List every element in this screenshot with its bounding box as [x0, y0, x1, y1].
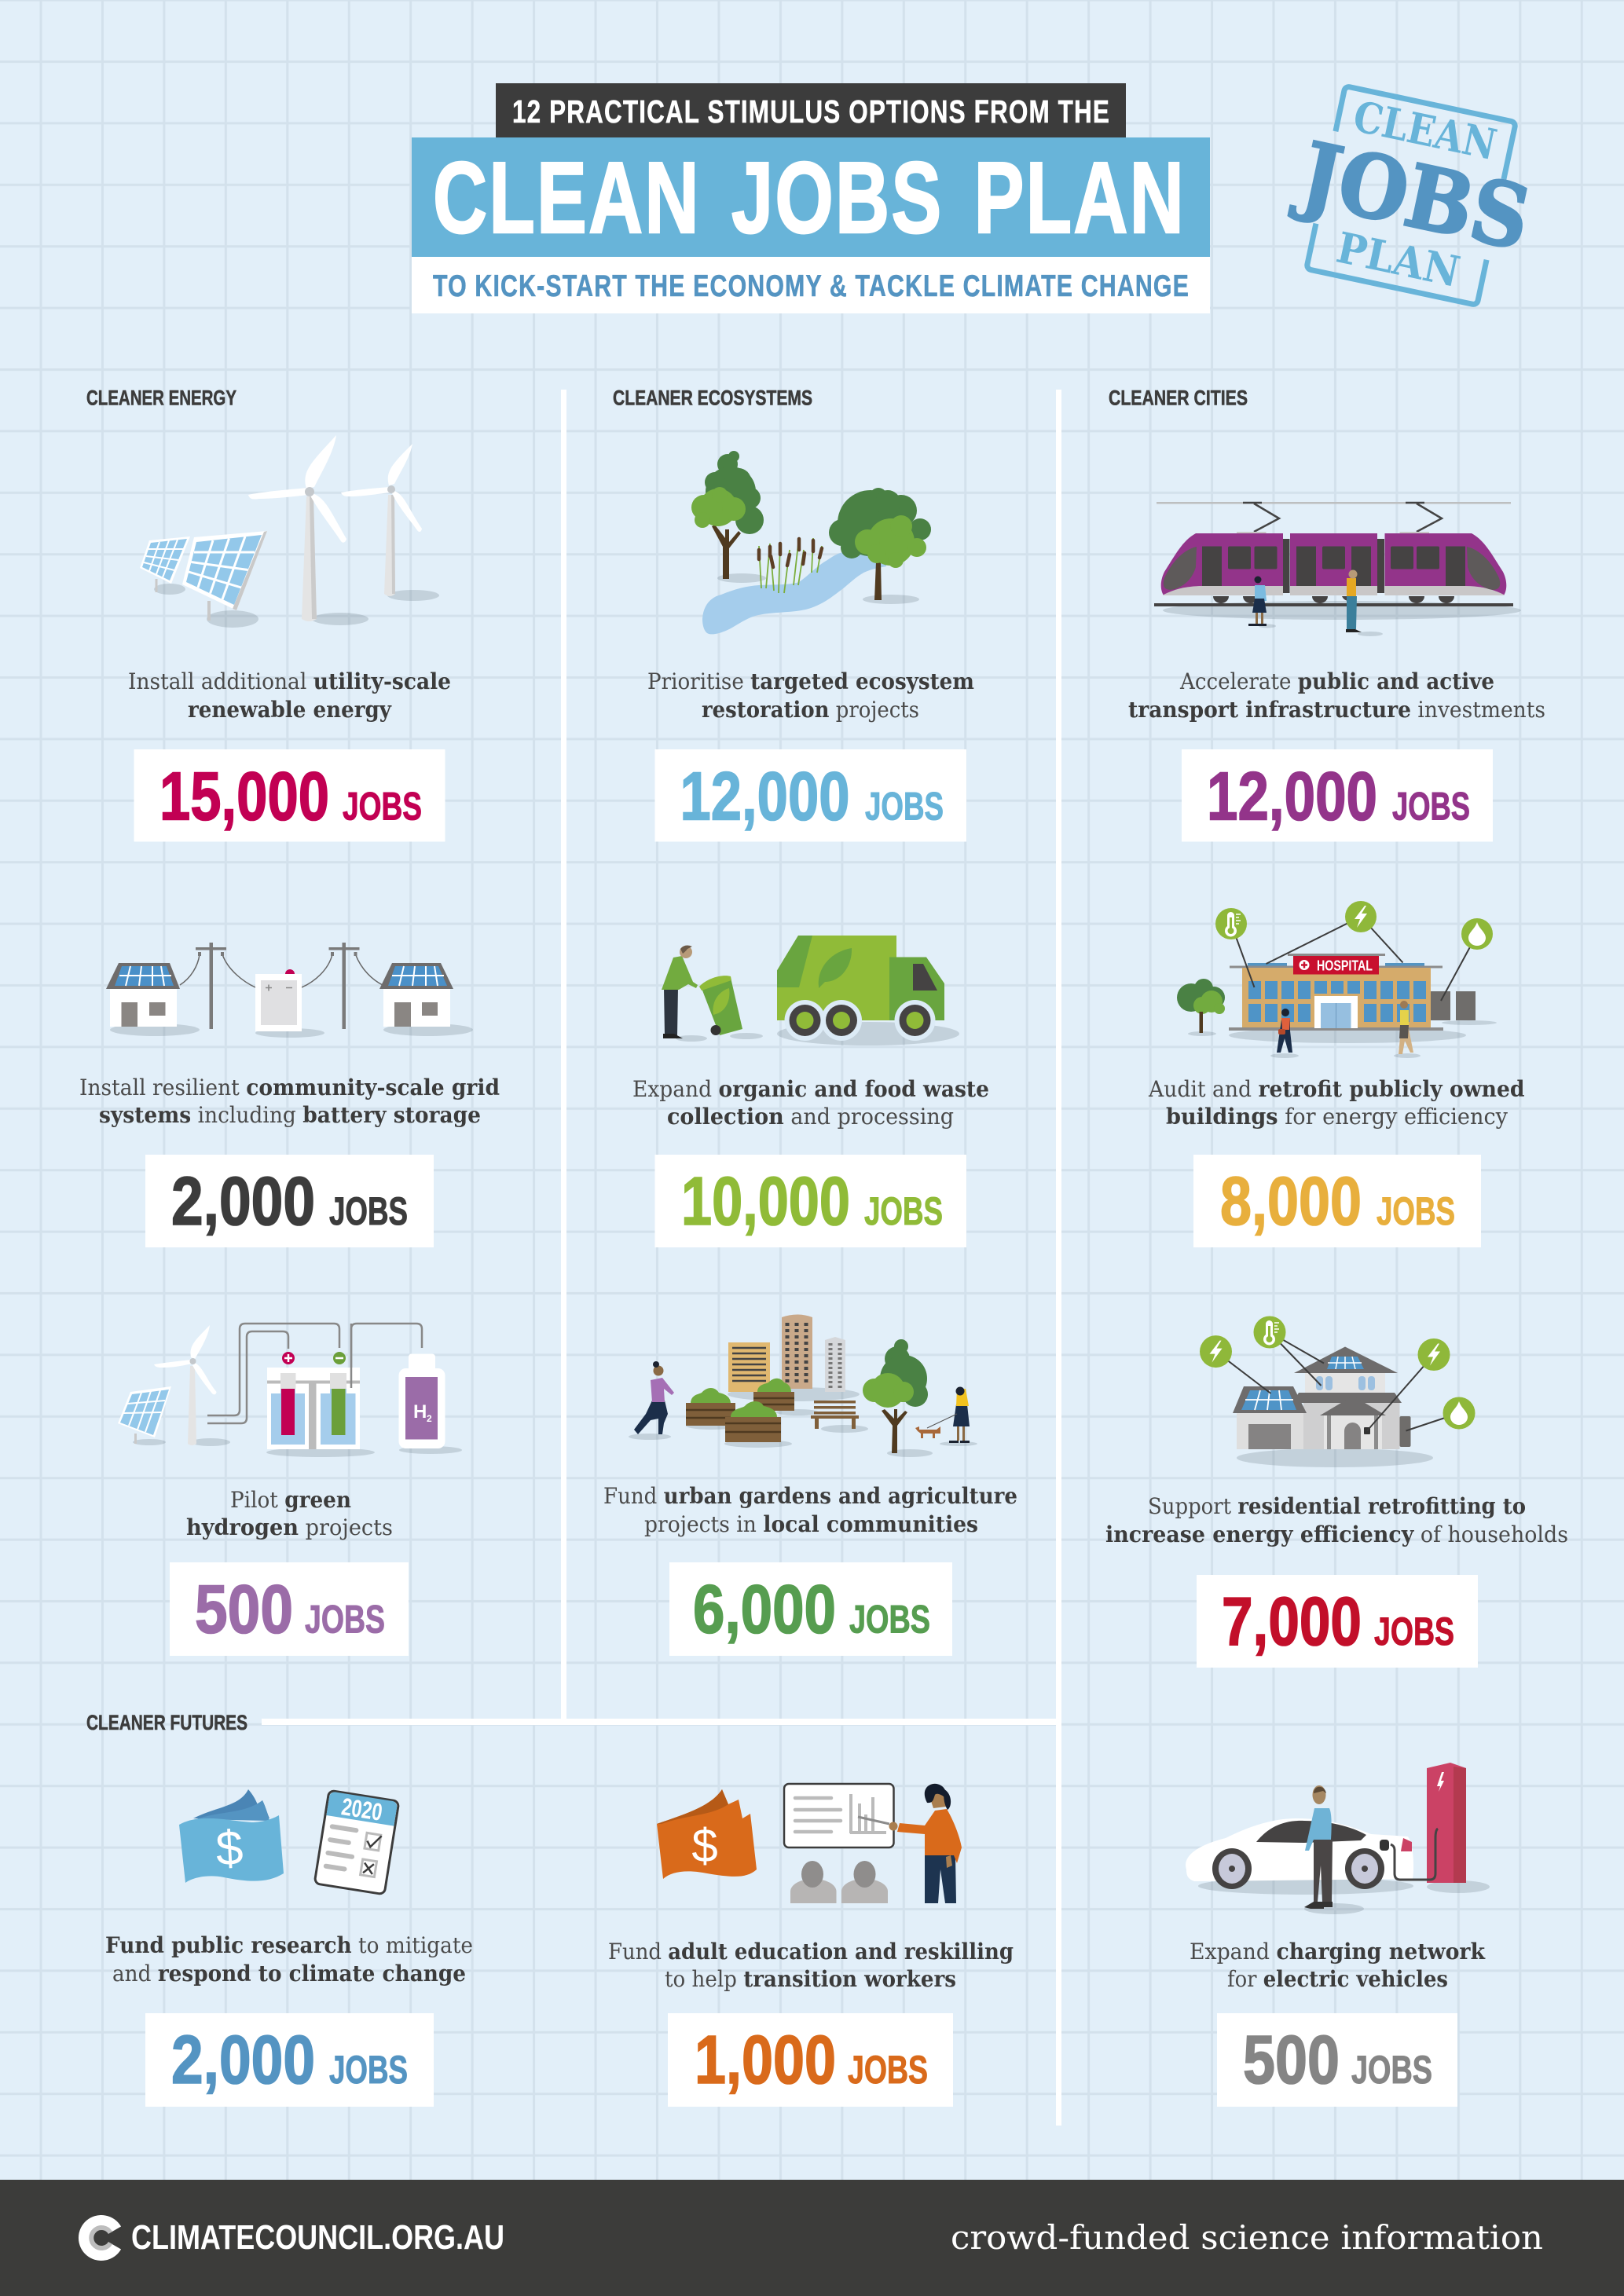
panel: community-scale grid	[79, 943, 500, 1247]
description line 2: projects in local communities	[644, 1511, 978, 1537]
description: Pilot green	[230, 1487, 351, 1513]
jobs badge: 8,000: 8,000	[1220, 1163, 1362, 1240]
icon: wind turbines and solar panels	[140, 435, 439, 628]
description line 2: buildings for energy efficiency	[1166, 1104, 1508, 1130]
description line 2: increase energy efficiency of households	[1105, 1522, 1568, 1547]
logo mark	[84, 2221, 116, 2255]
icon: banknote and presenter with audience	[657, 1784, 962, 1903]
jobs badge: 2,000: 2,000	[171, 1163, 315, 1240]
description: Prioritise targeted ecosystem	[647, 668, 974, 694]
jobs badge: 2,000	[145, 1155, 434, 1247]
stamp logo: clean jobs plan: PLAN	[1333, 222, 1465, 297]
description: Fund public research to mitigate	[105, 1932, 473, 1958]
jobs badge: 1,000	[668, 2013, 953, 2107]
description: Install resilient community-scale grid	[79, 1075, 500, 1100]
stamp logo: clean jobs plan: CLEAN	[1349, 90, 1501, 170]
description: Audit and retrofit publicly owned	[1148, 1076, 1524, 1102]
jobs badge: 6,000	[669, 1562, 952, 1656]
description line 2: restoration projects	[702, 697, 919, 723]
stamp logo: clean jobs plan	[1278, 80, 1547, 312]
icon: city park with gardens and people	[629, 1315, 977, 1457]
panel: retrofit public buildings	[1148, 901, 1524, 1247]
jobs badge: 15,000: 15,000	[159, 759, 329, 834]
jobs badge: 500: JOBS	[305, 1598, 385, 1642]
panel: charging network	[1186, 1763, 1490, 2107]
description: Accelerate public and active	[1179, 668, 1494, 694]
jobs badge: 7,000: 7,000	[1222, 1584, 1362, 1660]
icon: garbage truck and worker with bin	[662, 936, 959, 1045]
kicker bar	[496, 83, 1126, 137]
jobs badge: 12,000	[1182, 749, 1493, 842]
panel: ecosystem restoration	[647, 451, 974, 842]
section heading: cleaner ecosystems: CLEANER ECOSYSTEMS	[613, 386, 812, 410]
icon: house with efficiency markers	[1200, 1316, 1476, 1467]
icon: hospital with efficiency markers: HOSPITAL	[1317, 958, 1373, 974]
description line 2: and respond to climate change	[112, 1961, 466, 1987]
jobs badge: 10,000	[655, 1155, 966, 1247]
panel: public research	[105, 1789, 473, 2107]
section heading: cleaner energy: CLEANER ENERGY	[86, 386, 236, 410]
description line 2: to help transition workers	[665, 1966, 956, 1992]
description: Expand charging network	[1190, 1939, 1486, 1965]
panel: public and active transport	[1128, 502, 1545, 842]
description line 2: for electric vehicles	[1227, 1966, 1448, 1992]
description line 2: renewable energy	[188, 697, 392, 723]
jobs badge: 15,000	[134, 749, 445, 842]
icon: electrolyser, turbine and hydrogen bottle	[118, 1324, 462, 1457]
icon: banknotes and 2020 checklist	[179, 1789, 399, 1895]
panel: green hydrogen	[118, 1324, 462, 1656]
icon: trees, river and reeds	[691, 451, 931, 634]
description: Support residential retrofitting to	[1148, 1493, 1526, 1519]
icon: banknotes and 2020 checklist: 2020	[339, 1792, 384, 1826]
stamp logo: clean jobs plan: JOBS	[1287, 122, 1538, 269]
description: Install additional utility-scale	[128, 668, 451, 694]
jobs badge: 12,000: JOBS	[865, 784, 944, 828]
icon: houses, poles and battery	[106, 943, 473, 1038]
subtitle	[412, 257, 1210, 313]
description: Fund urban gardens and agriculture	[603, 1483, 1017, 1509]
icon: banknotes and 2020 checklist: $	[214, 1821, 244, 1877]
panel: adult education	[608, 1784, 1014, 2107]
column dividers	[262, 390, 1061, 2126]
jobs badge: 10,000: JOBS	[864, 1189, 943, 1233]
jobs badge: 500	[1217, 2013, 1457, 2107]
jobs badge: 2,000: JOBS	[329, 2048, 408, 2092]
jobs badge: 6,000: JOBS	[849, 1598, 930, 1642]
jobs badge: 12,000: 12,000	[1207, 759, 1377, 834]
jobs badge: 10,000: 10,000	[681, 1163, 850, 1240]
jobs badge: 500: 500	[195, 1571, 293, 1648]
jobs badge: 2,000	[145, 2013, 434, 2107]
tagline: crowd-funded science information	[951, 2218, 1543, 2257]
jobs badge: 500: JOBS	[1351, 2048, 1432, 2092]
description line 2: hydrogen projects	[186, 1514, 393, 1540]
title block	[412, 83, 1210, 313]
jobs badge: 12,000	[655, 749, 966, 842]
jobs badge: 7,000	[1197, 1575, 1478, 1668]
icon: electric car, driver and charger	[1186, 1763, 1490, 1914]
jobs badge: 8,000	[1193, 1155, 1481, 1247]
jobs badge: 1,000: JOBS	[848, 2048, 928, 2092]
jobs badge: 2,000: 2,000	[171, 2022, 315, 2098]
jobs badge: 2,000: JOBS	[329, 1189, 408, 1233]
panel: residential retrofitting	[1105, 1316, 1568, 1668]
description line 2: transport infrastructure investments	[1128, 697, 1545, 723]
jobs badge: 500	[170, 1562, 409, 1656]
footer	[0, 2180, 1624, 2296]
website: CLIMATECOUNCIL.ORG.AU	[131, 2218, 504, 2257]
icon: electrolyser, turbine and hydrogen bottle: 2	[427, 1413, 432, 1424]
section heading: cleaner cities: CLEANER CITIES	[1109, 386, 1248, 410]
panel: urban gardens	[603, 1315, 1017, 1656]
icon: hospital with efficiency markers	[1177, 901, 1497, 1058]
jobs badge: 12,000: 12,000	[680, 759, 850, 834]
jobs badge: 8,000: JOBS	[1377, 1189, 1455, 1233]
jobs badge: 15,000: JOBS	[343, 784, 422, 828]
icon: tram with people	[1154, 502, 1521, 636]
kicker bar: 12 PRACTICAL STIMULUS OPTIONS FROM THE	[512, 93, 1110, 130]
jobs badge: 7,000: JOBS	[1374, 1609, 1454, 1653]
section heading: cleaner futures: CLEANER FUTURES	[86, 1711, 247, 1734]
jobs badge: 500: 500	[1243, 2022, 1340, 2098]
icon: electrolyser, turbine and hydrogen bottle: H	[413, 1401, 427, 1423]
jobs badge: 6,000: 6,000	[693, 1571, 836, 1648]
subtitle: TO KICK-START THE ECONOMY & TACKLE CLIMATE CHANGE	[433, 269, 1190, 303]
panel: utility-scale renewable energy	[128, 435, 451, 842]
description: Expand organic and food waste	[632, 1076, 989, 1102]
icon: banknote and presenter with audience: $	[691, 1819, 718, 1872]
description line 2: systems including battery storage	[99, 1102, 481, 1128]
description: Fund adult education and reskilling	[608, 1939, 1014, 1965]
jobs badge: 12,000: JOBS	[1392, 784, 1470, 828]
panel: organic and food waste	[632, 936, 989, 1247]
main title: CLEAN JOBS PLAN	[433, 141, 1186, 255]
jobs badge: 1,000: 1,000	[695, 2022, 836, 2098]
description line 2: collection and processing	[667, 1104, 954, 1130]
